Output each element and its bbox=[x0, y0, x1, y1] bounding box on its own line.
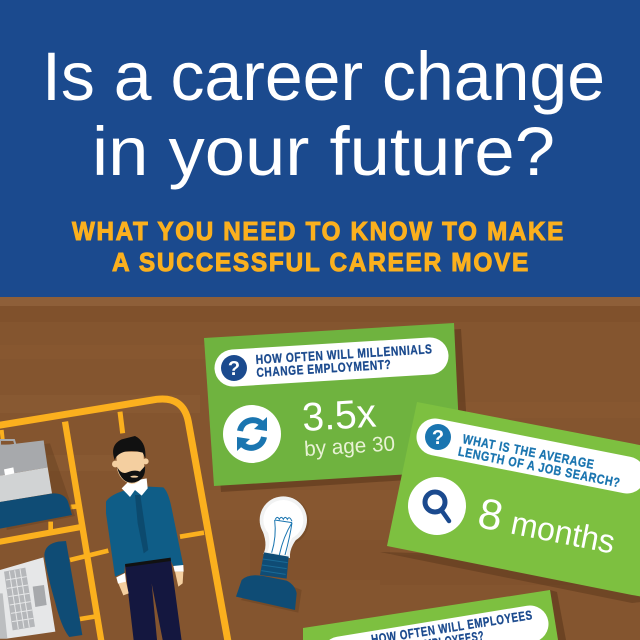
title: Is a career change bbox=[42, 38, 605, 115]
icon: refresh bbox=[223, 405, 281, 463]
cuffs and hands bbox=[118, 572, 183, 595]
icon: question mark bbox=[221, 355, 247, 381]
card: millennials bbox=[204, 323, 470, 492]
statistic bbox=[301, 391, 396, 461]
icon: question mark bbox=[425, 424, 451, 450]
beard bbox=[117, 466, 145, 483]
question pill bbox=[435, 437, 627, 475]
trousers bbox=[125, 558, 182, 640]
question text bbox=[255, 341, 434, 380]
question text: WHAT IS THE AVERAGE bbox=[461, 431, 596, 472]
icon: question mark: ? bbox=[432, 427, 444, 449]
header panel bbox=[0, 0, 640, 297]
card: job search bbox=[380, 402, 640, 603]
shirt bbox=[106, 487, 183, 577]
subtitle: WHAT YOU NEED TO KNOW TO MAKE bbox=[72, 216, 565, 246]
question text: HOW OFTEN WILL MILLENNIALS bbox=[255, 341, 433, 367]
title: in your future? bbox=[92, 113, 555, 190]
statistic: by age 30 bbox=[303, 432, 396, 461]
head bbox=[116, 452, 145, 484]
wood table background bbox=[0, 297, 640, 640]
hair bbox=[113, 436, 145, 460]
question pill bbox=[340, 624, 530, 640]
statistic: 8 bbox=[474, 489, 507, 541]
icon: laptop bbox=[0, 541, 82, 639]
title bbox=[42, 38, 605, 190]
yellow model kit frame bbox=[0, 399, 228, 640]
collar bbox=[122, 478, 148, 497]
subtitle bbox=[72, 216, 565, 277]
subtitle: A SUCCESSFUL CAREER MOVE bbox=[112, 247, 530, 277]
tie bbox=[135, 495, 148, 553]
question pill bbox=[233, 356, 430, 368]
icon: question mark: ? bbox=[228, 358, 240, 380]
statistic: 3.5x bbox=[301, 392, 377, 440]
question text bbox=[370, 607, 536, 640]
icon: light bulb stamp bbox=[236, 496, 309, 613]
icon: briefcase bbox=[0, 440, 75, 530]
statistic bbox=[474, 489, 620, 563]
statistic: months bbox=[508, 504, 618, 560]
belt bbox=[125, 558, 171, 567]
card: employees bbox=[303, 590, 566, 640]
icon: magnifier bbox=[408, 477, 466, 535]
icon: man figure bbox=[106, 436, 184, 640]
question text: CHANGE EMPLOYMENT? bbox=[256, 357, 392, 380]
